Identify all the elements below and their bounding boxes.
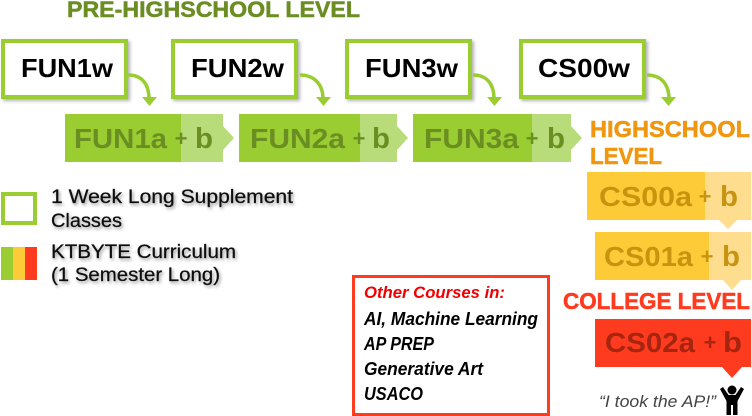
course bar: FUN3a + b: FUN3a <box>424 123 519 154</box>
legend: week long classes: Classes <box>51 211 122 232</box>
legend: ktbyte curriculum: KTBYTE Curriculum <box>51 242 236 263</box>
arrow: FUN3w to FUN3a <box>473 75 502 106</box>
other courses list <box>363 309 538 404</box>
course bar: CS02a + b: b <box>723 327 742 359</box>
other courses list: AP PREP <box>363 334 435 354</box>
course bar: CS00a + b <box>587 172 751 229</box>
course bar: CS02a + b: + <box>704 330 716 355</box>
icon: person with raised arms <box>720 386 744 415</box>
week box: FUN1w <box>3 41 126 97</box>
other courses list: Generative Art <box>364 359 484 379</box>
course bar: FUN1a + b: + <box>175 126 187 151</box>
legend: ktbyte curriculum: (1 Semester Long) <box>51 265 220 286</box>
course bar: CS00a + b: + <box>699 184 711 209</box>
week box: FUN3w <box>347 41 470 97</box>
course bar: FUN2a + b: FUN2a <box>250 123 345 154</box>
legend: ktbyte curriculum <box>1 242 236 286</box>
panel: other courses <box>354 276 548 414</box>
arrow: CS00w to CS00a <box>647 75 676 106</box>
heading: highschool level: HIGHSCHOOL <box>590 116 750 142</box>
heading: highschool level <box>590 116 750 169</box>
other courses list: USACO <box>364 384 423 404</box>
course bar: CS01a + b: + <box>701 244 713 269</box>
course bar: CS02a + b <box>595 319 751 378</box>
course bar: FUN3a + b: b <box>547 123 565 155</box>
course bar: FUN3a + b: + <box>526 126 538 151</box>
week box: FUN1w: FUN1w <box>21 53 114 83</box>
legend: week long classes <box>3 187 294 232</box>
course bar: FUN1a + b <box>65 114 234 162</box>
course bar: CS01a + b <box>595 232 751 290</box>
course bar: CS00a + b: CS00a <box>599 181 692 212</box>
course bar: FUN3a + b <box>413 114 582 162</box>
legend: week long classes: 1 Week Long Supplement <box>51 187 294 208</box>
course bar: FUN2a + b: b <box>372 123 390 155</box>
quote: I took the AP: “I took the AP!” <box>599 392 717 411</box>
week box: FUN2w <box>173 41 296 97</box>
course bar: FUN1a + b: b <box>195 123 213 155</box>
course bar: CS02a + b: CS02a <box>605 327 695 358</box>
course bar: CS01a + b: b <box>722 241 740 273</box>
week box: FUN2w: FUN2w <box>191 53 285 83</box>
week box: CS00w <box>521 41 644 97</box>
arrow: FUN2w to FUN2a <box>300 75 331 106</box>
course bar: FUN2a + b <box>239 114 408 162</box>
week box: CS00w: CS00w <box>538 53 631 83</box>
other courses heading: Other Courses in: <box>364 283 505 302</box>
course bar: FUN2a + b: + <box>353 126 365 151</box>
week box: FUN3w: FUN3w <box>365 53 459 83</box>
course bar: CS00a + b: b <box>720 181 738 213</box>
heading: college level: COLLEGE LEVEL <box>563 288 750 314</box>
course bar: CS01a + b: CS01a <box>604 241 693 272</box>
course bar: FUN1a + b: FUN1a <box>74 123 167 154</box>
other courses list: AI, Machine Learning <box>363 309 538 329</box>
arrow: FUN1w to FUN1a <box>128 75 157 106</box>
heading: highschool level: LEVEL <box>590 143 662 169</box>
